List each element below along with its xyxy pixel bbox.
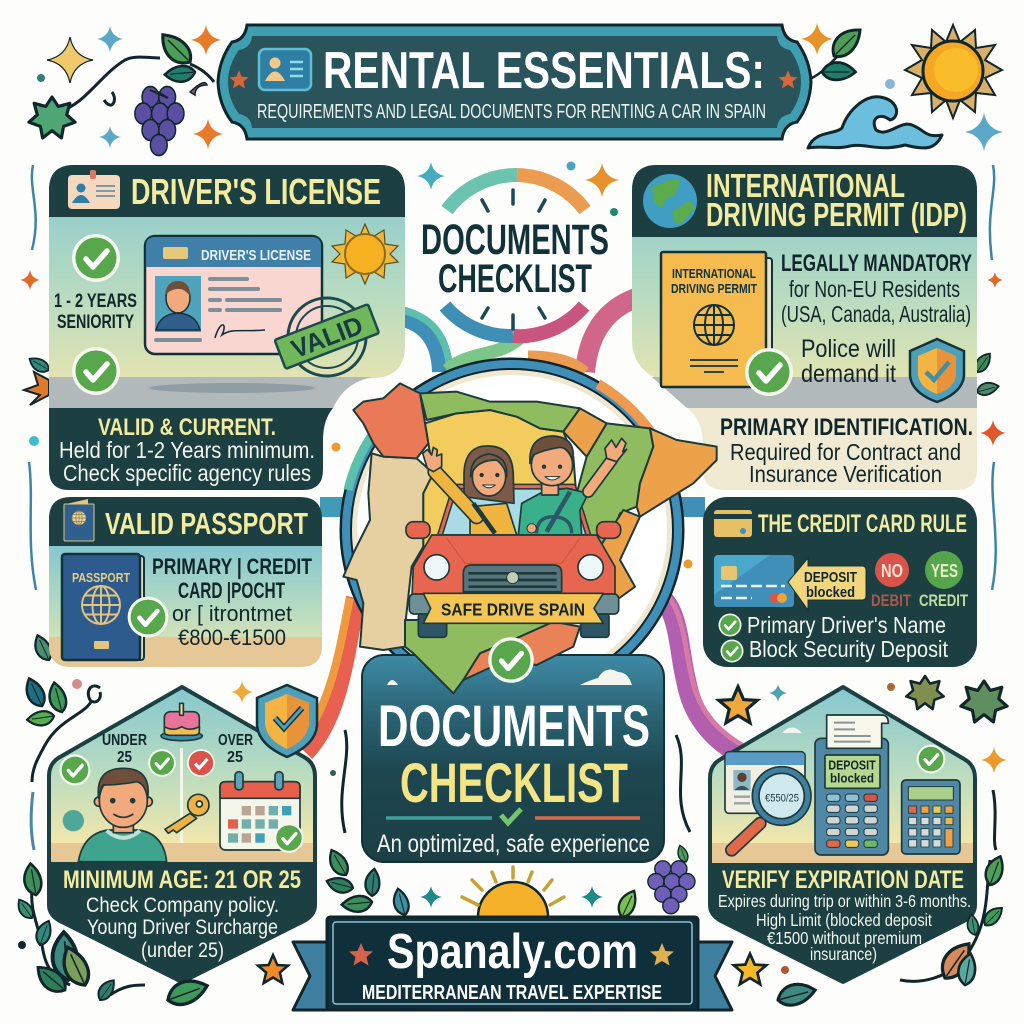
car body (412, 535, 615, 602)
subtitle: REQUIREMENTS AND LEGAL DOCUMENTS FOR RENTING A CAR IN SPAIN (257, 101, 766, 123)
icon: license card (145, 236, 322, 354)
panel: valid passport (49, 497, 322, 667)
hexagon outline (710, 687, 975, 982)
main title: RENTAL ESSENTIALS: (323, 42, 765, 100)
map of spain (343, 383, 717, 693)
man (518, 436, 627, 535)
seniority checks and text: 1 - 2 YEARS (54, 291, 137, 312)
verify text: €1500 without premium (767, 928, 922, 948)
icon: earth globe (643, 174, 697, 228)
icon: idp booklet (661, 252, 772, 387)
wheels (418, 613, 609, 637)
windshield (440, 488, 588, 535)
portugal (343, 453, 433, 650)
license note: Check specific agency rules (63, 460, 311, 486)
passport floor (49, 637, 322, 667)
icon: passport book: PASSPORT (72, 570, 130, 585)
passport header (49, 497, 322, 546)
icon: id card (725, 752, 805, 813)
ribbon banner ends (293, 942, 732, 1010)
aragon strip (563, 408, 607, 457)
icon: idp booklet: INTERNATIONAL (672, 266, 756, 281)
icon: card terminal (815, 715, 888, 855)
verify text: Expires during trip or within 3-6 months. (718, 891, 971, 911)
idp note: PRIMARY IDENTIFICATION. (720, 414, 973, 441)
deposit blocked arrow (788, 558, 866, 610)
valid stamp (275, 298, 379, 376)
panel: international driving permit (632, 165, 977, 490)
safe drive banner: SAFE DRIVE SPAIN (441, 600, 585, 620)
hexagon scene (710, 687, 976, 988)
valid stamp: VALID (287, 310, 367, 364)
safe drive banner (423, 593, 603, 623)
center check badge (488, 637, 534, 683)
under and over labels: UNDER (102, 732, 147, 749)
brand tagline: MEDITERRANEAN TRAVEL EXPERTISE (362, 982, 662, 1004)
icon: card terminal: blocked (830, 772, 874, 786)
deposit blocked arrow: blocked (806, 584, 855, 601)
panel: minimum age hexagon (49, 687, 315, 987)
icon: id card (259, 49, 311, 90)
icon: shield over hexagon (257, 685, 317, 757)
center panel tagline: An optimized, safe experience (377, 830, 650, 858)
icon: bank card (714, 555, 794, 607)
license floor strip (49, 377, 372, 408)
credit rule list: Primary Driver's Name (747, 612, 946, 638)
under and over labels: 25 (117, 749, 132, 766)
deposit blocked arrow: DEPOSIT (804, 569, 857, 586)
car frame (440, 487, 588, 535)
mirrors (406, 522, 621, 538)
catalonia (637, 428, 717, 517)
icon: id badge (68, 170, 120, 209)
idp floor strip (652, 377, 977, 408)
passport body (49, 546, 322, 667)
passport text: or [ itrontmet (172, 601, 292, 626)
license header (49, 165, 405, 217)
icon: key (165, 794, 209, 833)
passport text: CARD |POCHT (178, 578, 285, 603)
bottom decorations: sun, leaves, grapes (325, 844, 695, 920)
icon: license card: DRIVER'S LICENSE (201, 247, 311, 264)
credit rule list (718, 612, 949, 663)
decoration: lower right botanicals (676, 676, 1007, 1009)
decoration: top left botanicals (29, 25, 223, 156)
headlights (424, 555, 603, 580)
galicia (353, 383, 428, 458)
verify check (917, 745, 945, 773)
icon: small passport (64, 499, 94, 541)
east green region (573, 423, 653, 547)
passport check (128, 597, 168, 637)
center panel title: CHECKLIST (400, 751, 628, 814)
banner stars (349, 943, 674, 966)
car with couple (406, 436, 627, 637)
panel: verify expiration hexagon (710, 687, 976, 988)
icon: shield (910, 339, 964, 402)
license note: Held for 1-2 Years minimum. (59, 437, 315, 463)
idp note: Insurance Verification (749, 461, 942, 487)
decoration: side vines and sparkles (20, 165, 1006, 663)
idp requirement text: demand it (801, 360, 896, 388)
title banner (218, 25, 811, 139)
floor shadow (149, 383, 315, 393)
center panel background (362, 655, 664, 862)
age scene icons (63, 703, 300, 862)
idp title: INTERNATIONAL (706, 167, 905, 204)
icon: sun (332, 224, 398, 284)
verify text (718, 866, 971, 964)
seniority checks and text: SENIORITY (57, 312, 134, 333)
idp title (706, 167, 967, 233)
verify text: insurance) (810, 944, 877, 964)
hexagon outline (49, 687, 315, 982)
woman (423, 446, 517, 535)
passport text: PRIMARY | CREDIT (152, 554, 312, 579)
idp header (632, 165, 977, 237)
center heading: documents checklist with clock arcs: CHECKLIST (438, 257, 592, 301)
icon: idp booklet: DRIVING PERMIT (671, 281, 757, 296)
banner shape (218, 25, 811, 139)
passport text: €800-€1500 (178, 625, 286, 650)
panel: driver's license (49, 165, 405, 490)
northern coast (420, 392, 580, 432)
license title: DRIVER'S LICENSE (131, 171, 381, 212)
andalusia (405, 620, 560, 693)
valencia (600, 510, 640, 600)
panel: center documents checklist (362, 655, 664, 862)
age text: Young Driver Surcharge (87, 916, 278, 939)
license note: VALID & CURRENT. (98, 414, 276, 441)
icon: small card (714, 510, 752, 537)
idp requirement text (781, 250, 972, 388)
icon: cake (161, 703, 202, 741)
seniority checks and text (54, 234, 137, 395)
idp note (687, 408, 977, 490)
age text: (under 25) (141, 939, 224, 962)
age text: MINIMUM AGE: 21 OR 25 (63, 866, 301, 894)
idp body (632, 165, 977, 408)
icon: calculator (902, 780, 960, 854)
icon: person (78, 768, 167, 862)
idp check (745, 348, 793, 396)
grille (463, 565, 562, 592)
central circle (341, 359, 683, 701)
icon: magnifying glass: €550/25 (765, 793, 799, 805)
passport text (152, 554, 312, 650)
yes credit: YES (931, 561, 958, 581)
idp requirement text: for Non-EU Residents (789, 276, 960, 302)
brand name: Spanaly.com (387, 925, 638, 979)
age text (63, 866, 301, 962)
license body (49, 165, 405, 408)
clouds (387, 670, 632, 685)
idp requirement text: Police will (801, 335, 896, 363)
center heading: documents checklist with clock arcs: DOCUMENTS (421, 216, 609, 264)
credit rule list: Block Security Deposit (749, 636, 949, 662)
divider with check (386, 809, 640, 823)
center panel title (378, 694, 650, 814)
connector ribbons (298, 298, 742, 752)
southern coast (463, 622, 580, 680)
under and over labels: OVER (218, 732, 253, 749)
decoration: top right sun and wave (801, 23, 1003, 151)
age checks (59, 749, 304, 853)
age text: Check Company policy. (86, 894, 279, 917)
passport title: VALID PASSPORT (105, 506, 308, 541)
icon: calendar (220, 772, 300, 850)
under and over labels: 25 (227, 749, 243, 766)
center panel title: DOCUMENTS (378, 694, 650, 759)
castile (423, 410, 577, 547)
icon: passport book (62, 554, 144, 660)
no debit (871, 553, 911, 610)
no debit: NO (881, 561, 903, 581)
decoration: lower left botanicals (14, 675, 347, 1009)
yes credit: CREDIT (919, 591, 968, 610)
idp note: Required for Contract and (730, 439, 961, 465)
icon: magnifying glass (732, 767, 811, 850)
center heading: documents checklist with clock arcs (417, 162, 619, 336)
icon: card terminal: DEPOSIT (828, 758, 876, 772)
brand banner (327, 917, 698, 1010)
under and over labels (102, 732, 253, 766)
no debit: DEBIT (871, 591, 911, 610)
teal blob (63, 810, 84, 831)
verify text: High Limit (blocked deposit (756, 910, 932, 930)
panel: credit card rule (703, 497, 977, 667)
banner stars (229, 70, 798, 88)
credit card background (703, 497, 977, 667)
license note (49, 408, 333, 490)
yes credit (919, 551, 968, 610)
bumper (409, 594, 619, 614)
verification scene icons (725, 715, 960, 855)
hexagon scene (49, 687, 315, 987)
